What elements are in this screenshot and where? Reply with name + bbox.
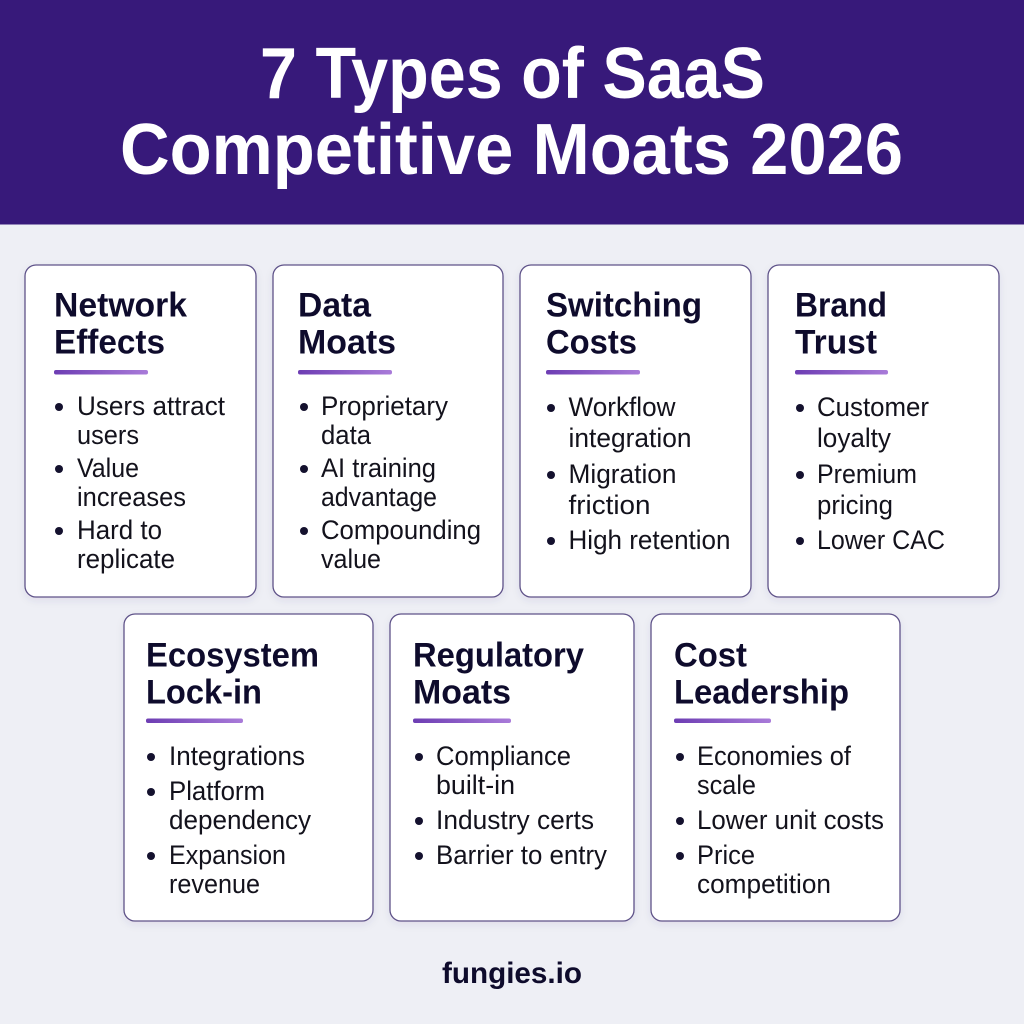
bullet list: Compounding (321, 515, 481, 545)
bullet list: scale (697, 770, 756, 800)
bullet list: Workflow (568, 392, 676, 422)
bullet list: Value (77, 453, 139, 483)
bullet list: Hard to (77, 515, 162, 545)
heading: Switching Costs: Switching (546, 286, 702, 324)
bullet list (300, 391, 481, 574)
title: Competitive Moats 2026 (120, 110, 903, 190)
bullet list: increases (77, 482, 186, 512)
heading: Switching Costs: Costs (546, 324, 637, 362)
heading: Data Moats (298, 286, 396, 362)
heading: Ecosystem Lock-in (146, 636, 319, 712)
accent bar (298, 370, 392, 374)
panel: Regulatory Moats (390, 614, 634, 921)
title (120, 34, 903, 190)
accent bar (146, 718, 243, 723)
bullet list: Expansion (169, 840, 286, 870)
bullet list (796, 392, 945, 555)
panel: Network Effects (25, 265, 256, 597)
panel: Ecosystem Lock-in (124, 614, 373, 921)
accent bar (795, 370, 888, 374)
bullet list: users (77, 420, 139, 450)
bullet list: Industry certs (436, 805, 594, 835)
bullet list: dependency (169, 805, 312, 835)
bullet list: friction (568, 490, 650, 520)
bullet list: Barrier to entry (436, 840, 608, 870)
bullet list: loyalty (817, 423, 892, 453)
accent bar (674, 718, 771, 723)
bullet list: advantage (321, 482, 437, 512)
bullet list (415, 741, 608, 870)
heading: Brand Trust (795, 286, 887, 362)
heading: Cost Leadership (674, 636, 849, 712)
bullet list: Price (697, 840, 755, 870)
bullet list: pricing (817, 490, 893, 520)
heading: Cost Leadership: Cost (674, 636, 747, 674)
bullet list: High retention (568, 525, 730, 555)
bullet list: Migration (568, 459, 676, 489)
heading: Brand Trust: Brand (795, 286, 887, 324)
panel: Brand Trust (768, 265, 999, 597)
bullet list: built-in (436, 770, 515, 800)
footer brand: fungies.io (442, 957, 582, 990)
bullet list: Compliance (436, 741, 571, 771)
bullet list: Lower unit costs (697, 805, 884, 835)
heading: Network Effects: Network (54, 286, 187, 324)
heading: Data Moats: Data (298, 286, 372, 324)
heading: Regulatory Moats (413, 636, 584, 712)
heading: Regulatory Moats: Regulatory (413, 636, 584, 674)
bullet list: Economies of (697, 741, 852, 771)
heading: Brand Trust: Trust (795, 324, 877, 362)
accent bar (413, 718, 511, 723)
bullet list: Integrations (169, 741, 305, 771)
bullet list: revenue (169, 869, 260, 899)
heading: Cost Leadership: Leadership (674, 674, 849, 712)
bullet list: competition (697, 869, 831, 899)
heading: Network Effects (54, 286, 187, 362)
bullet list: Proprietary (321, 391, 449, 421)
heading: Data Moats: Moats (298, 324, 396, 362)
heading: Switching Costs (546, 286, 702, 362)
bullet list (55, 391, 226, 574)
bullet list: integration (568, 423, 692, 453)
panel: Cost Leadership (651, 614, 900, 921)
panel: Data Moats (273, 265, 503, 597)
heading: Network Effects: Effects (54, 324, 165, 362)
panel: Switching Costs (520, 265, 751, 597)
bullet list: replicate (77, 544, 175, 574)
bullet list: Users attract (77, 391, 226, 421)
title: 7 Types of SaaS (260, 34, 765, 114)
bullet list: Premium (817, 459, 917, 489)
bullet list (676, 741, 884, 899)
accent bar (54, 370, 148, 374)
accent bar (546, 370, 640, 374)
heading: Regulatory Moats: Moats (413, 674, 511, 712)
bullet list (147, 741, 312, 899)
bullet list: Lower CAC (817, 525, 945, 555)
bullet list: Customer (817, 392, 929, 422)
bullet list: data (321, 420, 371, 450)
heading: Ecosystem Lock-in: Ecosystem (146, 636, 319, 674)
header banner (0, 0, 1024, 224)
bullet list (547, 392, 730, 555)
heading: Ecosystem Lock-in: Lock-in (146, 674, 262, 712)
bullet list: AI training (321, 453, 436, 483)
bullet list: value (321, 544, 381, 574)
bullet list: Platform (169, 776, 265, 806)
